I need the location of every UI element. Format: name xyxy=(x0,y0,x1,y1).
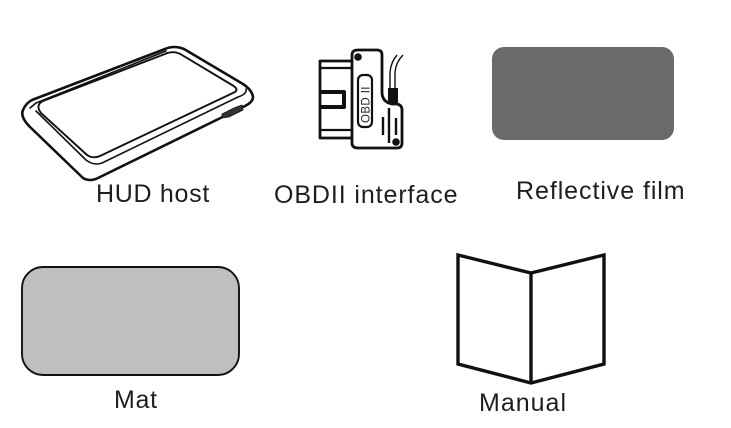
label: Reflective film: Reflective film xyxy=(516,177,686,205)
label: HUD host: HUD host xyxy=(96,180,210,208)
panel: Mat swatch xyxy=(22,267,239,375)
icon: OBDII interface: OBD II xyxy=(360,86,372,123)
icon: OBDII interface xyxy=(320,50,403,148)
panel: Reflective film swatch xyxy=(492,47,674,140)
label: Mat: Mat xyxy=(114,386,158,414)
icon: Manual book xyxy=(458,255,604,383)
icon: HUD host xyxy=(22,47,253,180)
label: OBDII interface: OBDII interface xyxy=(274,181,458,209)
label: Manual: Manual xyxy=(479,389,567,417)
